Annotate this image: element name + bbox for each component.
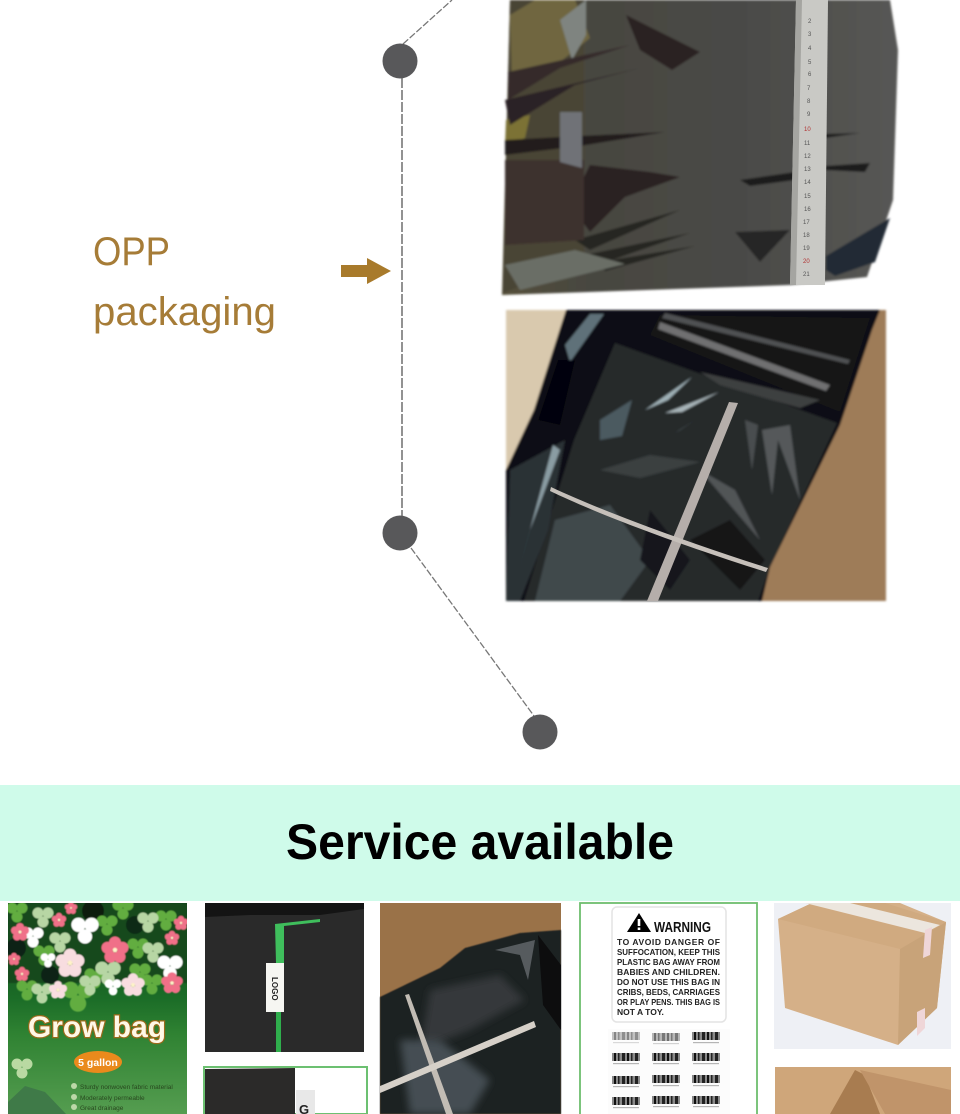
band: service available [0,785,960,901]
warning notice: DO NOT USE THIS BAG IN [617,977,720,987]
photo: bag with ruler: 3 [808,32,812,38]
feature list: Great drainage [80,1105,124,1112]
photo: bag with ruler: 14 [804,180,811,186]
icon: arrow [341,258,391,284]
icon: small clovers [8,1058,66,1114]
photo: bag with ruler [502,0,898,295]
panel: warning label [580,903,757,1114]
photo: open carton [775,1067,951,1114]
photo: bag with ruler: 2 [808,19,812,25]
photo: bag with ruler: 19 [803,246,810,252]
photo: bag with ruler: 15 [804,194,811,200]
warning notice: PLASTIC BAG AWAY FROM [617,957,720,967]
title: Grow bag: Grow bag [28,1011,166,1044]
warning notice: SUFFOCATION, KEEP THIS [617,947,720,957]
warning notice: CRIBS, BEDS, CARRIAGES [617,987,720,997]
photo: bag with ruler: 17 [803,220,810,226]
photo: fabric with woven logo label [205,903,364,1052]
photo: closed carton [774,903,951,1049]
heading: Service available: Service available [286,814,674,870]
badge: 5 gallon [74,1051,122,1073]
feature list [71,1083,173,1112]
warning notice: OR PLAY PENS. THIS BAG IS [617,997,720,1007]
barcode labels [608,1029,730,1114]
warning notice [612,907,726,1022]
photo: bag with ruler: 20 [803,259,810,265]
photo: black bag in carton [380,903,561,1114]
heading: OPP packaging: packaging [93,290,276,334]
warning notice: BABIES AND CHILDREN. [617,967,720,977]
photo: bag with ruler: 16 [804,207,811,213]
photo: bag with ruler: 10 [804,127,811,133]
photo: bag with ruler: 18 [803,233,810,239]
warning notice: WARNING [654,919,711,936]
feature list: Moderately permeable [80,1095,145,1102]
illustration: clover and blossoms [6,900,188,1012]
panel: grow bag card [6,900,188,1114]
warning notice: TO AVOID DANGER OF [617,937,720,947]
photo: bag with ruler: 7 [807,86,811,92]
feature list: Sturdy nonwoven fabric material [80,1084,173,1091]
photo: bag with ruler: 9 [807,112,811,118]
photo: bag with ruler: 12 [804,154,811,160]
photo: bag with ruler: 5 [808,60,812,66]
photo: bag with ruler: 6 [808,72,812,78]
timeline connector [382,0,558,750]
photo: bag with ruler: 13 [804,167,811,173]
photo: fabric with side label [204,1067,367,1114]
photo: fabric with woven logo label: LOGO [270,977,279,1001]
heading: OPP packaging: OPP [93,230,170,274]
photo: bags in carton [506,310,886,601]
heading: OPP packaging [93,230,276,334]
warning notice: NOT A TOY. [617,1007,664,1017]
photo: bag with ruler: 11 [804,141,811,147]
badge: 5 gallon: 5 gallon [78,1057,118,1069]
photo: bag with ruler: 8 [807,99,811,105]
photo: bag with ruler: 4 [808,46,812,52]
photo: bag with ruler: 21 [803,272,810,278]
